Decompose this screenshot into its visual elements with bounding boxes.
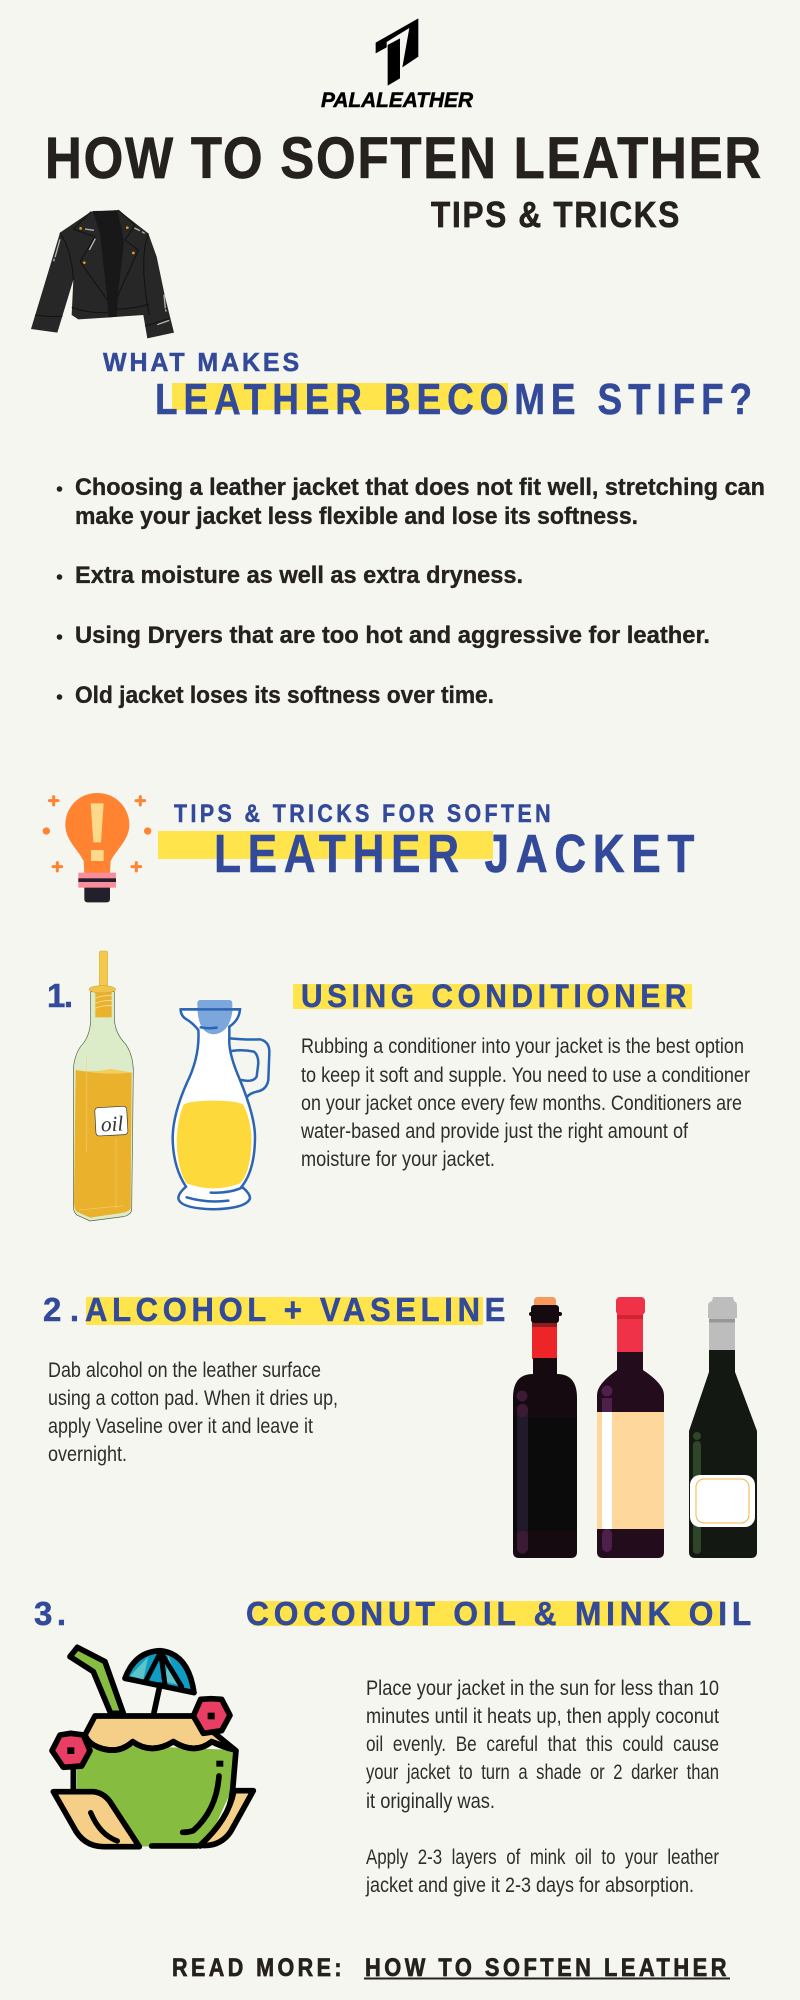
bottle one <box>513 1297 577 1558</box>
bullet list: causes of stiffness <box>57 474 765 709</box>
icon: light bulb with exclamation mark <box>43 793 151 902</box>
text: conditioner description: moisture for your jacket. <box>301 1148 495 1171</box>
text: coconut and mink oil description <box>365 1677 719 1897</box>
text: alcohol and vaseline description: using a cotton pad. When it dries up, <box>48 1387 338 1410</box>
text: coconut and mink oil description: oil evenly. Be careful that this could cause <box>366 1733 719 1756</box>
text: coconut and mink oil description: it originally was. <box>366 1790 495 1813</box>
heading: alcohol and vaseline: ALCOHOL + VASELINE <box>85 1291 510 1328</box>
text: coconut and mink oil description: your jacket to turn a shade or 2 darker than <box>366 1761 719 1784</box>
heading: leather jacket: LEATHER JACKET <box>214 824 701 884</box>
read more link: HOW TO SOFTEN LEATHER <box>365 1954 730 1982</box>
heading: what makes: WHAT MAKES <box>103 347 302 377</box>
text: alcohol and vaseline description: Dab alcohol on the leather surface <box>48 1359 321 1382</box>
icon: three bottles <box>513 1297 757 1558</box>
bullet list: causes of stiffness: Using Dryers that are too hot and aggressive for leather. <box>75 622 710 649</box>
icon: oil bottle: oil <box>100 1111 124 1137</box>
bullet list: causes of stiffness: Choosing a leather jacket that does not fit well, stretching can <box>75 474 765 501</box>
text: coconut and mink oil description: minutes until it heats up, then apply coconut <box>366 1705 719 1728</box>
bottle three <box>689 1297 757 1558</box>
text: coconut and mink oil description: Place your jacket in the sun for less than 10 <box>366 1677 719 1700</box>
text: coconut and mink oil description: Apply 2-3 layers of mink oil to your leather <box>366 1846 719 1869</box>
icon: glass jug <box>173 1000 269 1209</box>
text: alcohol and vaseline description: apply Vaseline over it and leave it <box>48 1415 313 1438</box>
logo: Palaleather <box>321 18 474 112</box>
heading: tips and tricks for soften: TIPS & TRICKS FOR SOFTEN <box>174 800 554 828</box>
text: conditioner description: water-based and provide just the right amount of <box>300 1120 688 1143</box>
bullet list: causes of stiffness: make your jacket less flexible and lose its softness. <box>75 503 638 530</box>
step number 3: 3. <box>34 1595 66 1632</box>
bullet list: causes of stiffness: Extra moisture as well as extra dryness. <box>75 562 523 589</box>
text: alcohol and vaseline description: overnight. <box>48 1443 127 1466</box>
step number 2: 2. <box>43 1291 79 1328</box>
read more label: READ MORE: <box>172 1954 345 1982</box>
icon: coconut drink <box>52 1647 253 1847</box>
text: alcohol and vaseline description <box>48 1359 338 1466</box>
text: coconut and mink oil description: jacket and give it 2-3 days for absorption. <box>365 1874 694 1897</box>
bottle two <box>597 1297 664 1558</box>
icon: oil bottle <box>73 951 133 1221</box>
logo: Palaleather: PALALEATHER <box>321 89 474 112</box>
subtitle: TIPS & TRICKS <box>431 194 681 235</box>
text: conditioner description <box>300 1035 750 1171</box>
heading: using conditioner: USING CONDITIONER <box>301 978 691 1014</box>
bullet list: causes of stiffness: Old jacket loses its softness over time. <box>75 682 494 709</box>
heading: coconut oil and mink oil: COCONUT OIL & MINK OIL <box>246 1595 756 1632</box>
step number 1: 1. <box>47 977 73 1014</box>
icon: leather jacket <box>31 210 174 338</box>
